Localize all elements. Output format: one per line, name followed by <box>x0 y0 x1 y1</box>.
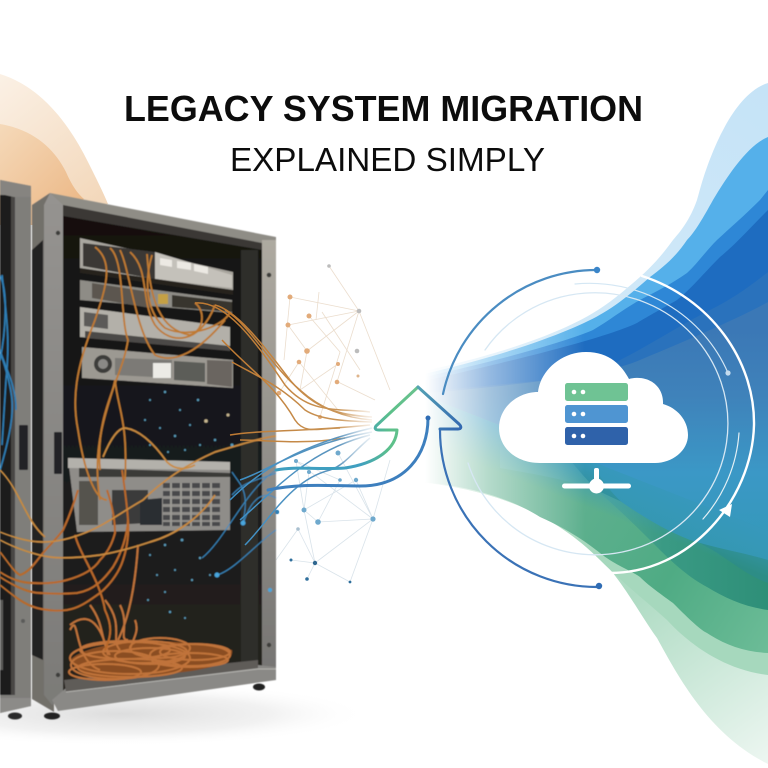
light blue wave <box>434 137 768 374</box>
rack dark interior <box>60 205 262 695</box>
medium blue wave <box>528 272 768 382</box>
blue cables and nodes inside rack <box>202 470 279 592</box>
server unit 5 <box>68 458 230 532</box>
thin ring <box>468 293 728 555</box>
arrow blue half <box>418 387 461 429</box>
white outer arc <box>610 276 754 573</box>
mid pale green band <box>467 490 768 675</box>
orange cables inside rack <box>75 247 230 500</box>
white inner arc <box>703 433 739 519</box>
arrow green half <box>276 387 418 470</box>
upper blue arc <box>443 270 597 394</box>
floor shadow <box>0 682 370 746</box>
pale top edge <box>450 83 768 368</box>
rack frame <box>32 193 276 711</box>
network nodes dissolving from cables <box>275 264 390 583</box>
server unit 3 <box>80 307 230 351</box>
lower blue arc <box>440 430 598 587</box>
cable coil on rack floor <box>69 545 232 680</box>
rack side panel <box>32 193 54 712</box>
migration orbit rings <box>440 267 754 589</box>
cloud server icon <box>499 352 688 494</box>
fibre bundle: blue cables to arrow <box>230 428 372 545</box>
server unit 2 <box>80 280 232 313</box>
bright blue wave <box>452 190 768 374</box>
blue to green soft fade <box>435 400 768 570</box>
white arrowhead <box>719 504 732 517</box>
background wave: blue and green right side <box>420 83 768 764</box>
pale green outer band <box>610 570 768 764</box>
heading line 1: LEGACY SYSTEM MIGRATION <box>124 88 643 129</box>
network connector <box>562 468 631 494</box>
dark blue wave <box>467 210 768 387</box>
orange cable bundle lower <box>0 470 128 650</box>
heading line 2: EXPLAINED SIMPLY <box>230 141 545 178</box>
fibre bundle: orange cables to arrow <box>195 303 372 442</box>
green band <box>440 422 768 653</box>
thin ring arc with end node <box>575 283 728 373</box>
light teal band <box>596 463 768 560</box>
lower blue body <box>420 302 768 531</box>
rack feet <box>44 684 265 720</box>
server stack <box>565 383 628 445</box>
background wave: orange top-left <box>0 74 108 225</box>
teal band <box>573 463 768 583</box>
left server rack <box>0 180 31 720</box>
cloud shape <box>499 352 688 463</box>
title <box>124 88 643 178</box>
server unit 1 <box>80 238 233 295</box>
server unit 4 <box>82 347 233 388</box>
deep green band <box>526 472 768 610</box>
migration arrow <box>268 387 461 490</box>
main server rack <box>0 193 279 720</box>
blue data sparks in rack <box>144 391 234 619</box>
arrow inner blue curve <box>268 418 428 490</box>
